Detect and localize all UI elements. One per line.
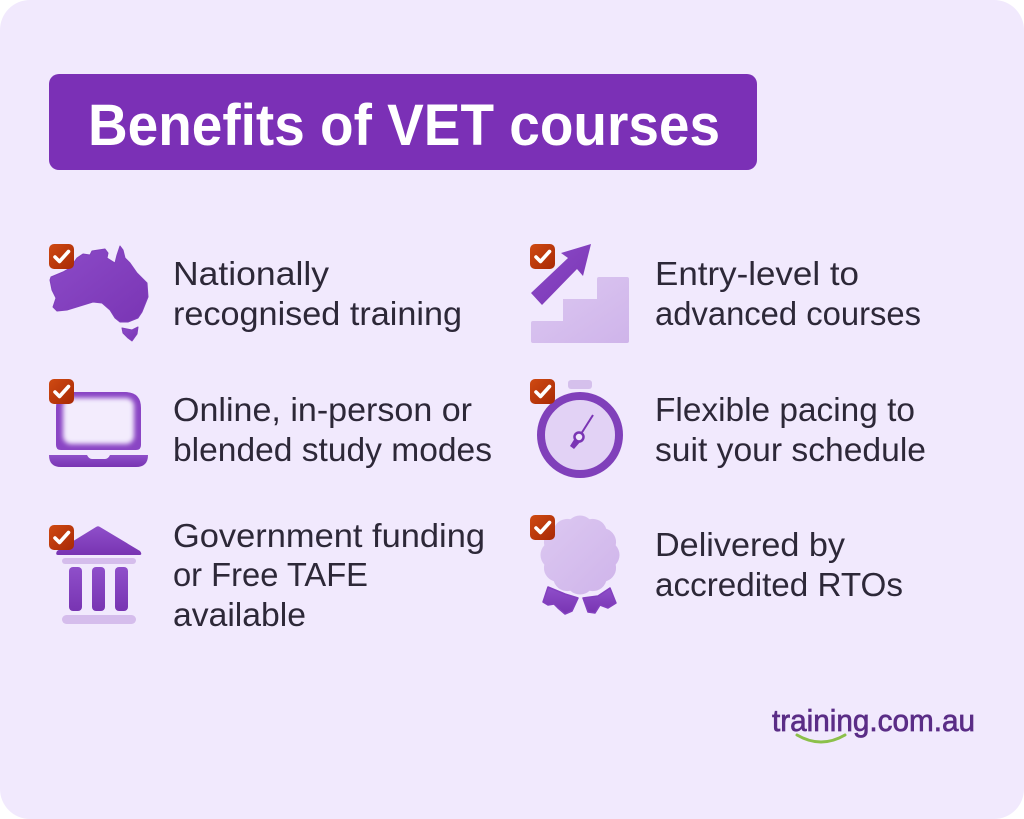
text: Nationally xyxy=(173,256,329,293)
text: Delivered by xyxy=(655,527,845,564)
title banner xyxy=(49,74,757,170)
icon: check mark xyxy=(530,379,555,404)
benefit: entry-level to advanced xyxy=(530,244,921,343)
icon: stopwatch xyxy=(541,380,619,474)
icon: Australia map xyxy=(50,246,148,341)
text xyxy=(173,256,462,333)
icon: rosette xyxy=(540,515,620,614)
text xyxy=(655,527,903,604)
icon: check mark xyxy=(49,525,74,550)
text: accredited RTOs xyxy=(655,567,903,604)
text: Entry-level to xyxy=(655,256,859,293)
text: Online, in-person or xyxy=(173,392,472,429)
text xyxy=(655,392,926,469)
icon: laptop xyxy=(49,392,148,467)
text: available xyxy=(173,597,306,634)
icon: check mark xyxy=(49,379,74,404)
benefit: study modes xyxy=(49,379,492,469)
text: suit your schedule xyxy=(655,432,926,469)
text: Government funding xyxy=(173,518,485,555)
benefit: flexible pacing xyxy=(530,379,926,474)
text: recognised training xyxy=(173,296,462,333)
benefit: government funding xyxy=(49,518,485,634)
logo: training.com.au: training.com.au xyxy=(772,703,975,738)
logo smile xyxy=(797,735,845,742)
icon: check mark xyxy=(530,244,555,269)
icon: check mark xyxy=(49,244,74,269)
icon: government building xyxy=(56,526,141,624)
text xyxy=(655,256,921,333)
icon: check mark xyxy=(530,515,555,540)
icon: stairs with arrow xyxy=(531,244,629,343)
text xyxy=(173,392,492,469)
text: or Free TAFE xyxy=(173,557,368,594)
text xyxy=(173,518,485,634)
text: Flexible pacing to xyxy=(655,392,915,429)
text: advanced courses xyxy=(655,296,921,333)
title: Benefits of VET courses xyxy=(88,93,720,158)
benefit: nationally recognised training xyxy=(49,244,462,341)
text: blended study modes xyxy=(173,432,492,469)
benefit: accredited RTOs xyxy=(530,515,903,614)
